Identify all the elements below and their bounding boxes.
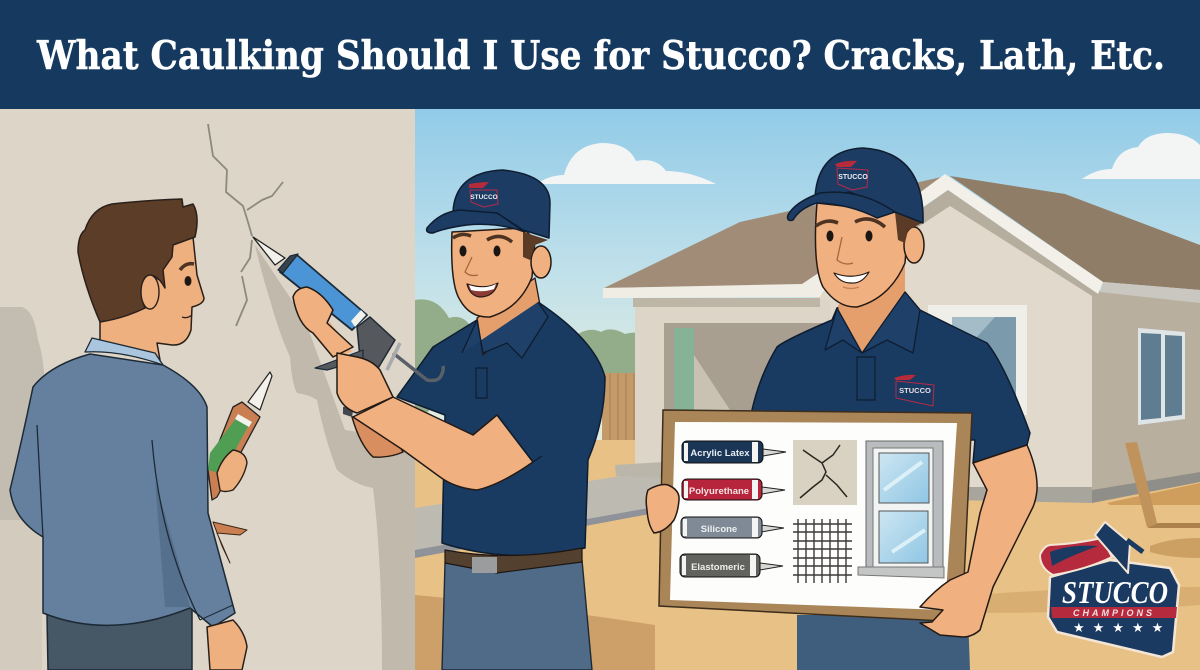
pants [442,560,592,670]
logo badge [1048,560,1179,657]
logo: Stucco Champions [1040,522,1179,657]
tube: Silicone: Silicone [701,524,737,535]
hair [523,232,548,260]
face [815,203,908,307]
tube [280,255,367,330]
lower hand [207,620,247,670]
forearm to top hand [313,322,352,357]
logo trowel [1095,522,1143,573]
sweater [10,354,235,627]
worker 2 [752,148,1030,670]
house: front wall [812,200,1092,490]
house: front window [928,305,1027,415]
neck [838,263,905,353]
house: left wing wall [635,300,830,464]
upper hand [293,287,353,357]
lath mesh sample [793,519,852,583]
cap [453,170,550,238]
sign board [659,410,972,622]
strap behind [213,522,247,563]
house [603,174,1200,528]
ear [141,275,159,309]
cap [815,148,923,223]
worker 2 right arm and hand [920,445,1037,637]
nozzle [253,237,285,265]
logo stars: ★★★★★ [1073,621,1171,636]
clouds [536,133,1200,184]
window sample [858,441,944,578]
pants [797,615,970,670]
collar [825,292,920,353]
tube: Polyurethane: Polyurethane [689,486,749,497]
hair [895,212,922,243]
face [452,228,535,317]
hand [217,450,247,492]
board frame [659,410,972,622]
arm and sleeve [353,397,533,490]
cap badge: STUCCO [838,174,868,181]
shirt [752,292,1030,463]
header bar [0,0,1200,109]
pants [47,605,192,670]
road [415,470,660,554]
trigger [315,350,363,370]
tube: Silicone [681,517,784,538]
back forearm [352,410,403,457]
eye, brow and smile [180,264,194,318]
house: side window [1138,328,1185,425]
house: left roof [604,176,946,288]
tube: Acrylic Latex: Acrylic Latex [690,448,750,459]
tube: Acrylic Latex [682,441,786,463]
cap badge: STUCCO [470,194,498,201]
collar [85,338,163,365]
ear [531,246,551,278]
caulk gun [253,237,443,417]
stucco crack sample [793,440,857,505]
gun head [357,317,395,370]
eyes, nose, mouth [453,234,512,297]
logo name: STUCCO [1062,574,1168,610]
hair [78,199,197,322]
house: right side wall [1092,290,1200,490]
board surface [670,422,957,610]
wooden stake [1125,442,1200,528]
wall shadows [255,245,415,670]
neck [477,278,540,355]
eyes, nose, mouth [816,219,885,288]
neck and face [100,237,204,360]
crack [208,124,283,326]
house: gable trim [855,174,1103,294]
shirt [397,302,605,555]
collar [462,302,548,358]
fence [602,373,638,441]
house: right roof [950,176,1200,290]
worker 1 [253,170,605,670]
tube: Elastomeric [680,554,783,577]
ear [904,227,924,263]
logo swoosh [1040,538,1112,575]
darker soil [415,595,655,670]
held caulk tube [208,372,272,500]
wall panel with crack [0,109,415,670]
trees [415,299,485,430]
belt [445,548,582,573]
tube: Polyurethane [682,479,785,500]
cap badge [469,182,498,207]
man with caulk tube, back view [10,199,272,670]
cap badge [835,161,868,190]
tube: Elastomeric: Elastomeric [691,562,745,573]
logo band: CHAMPIONS [1073,608,1155,618]
scene: outdoor background [415,109,1200,670]
lower hand [337,353,393,413]
gun rod and hook [393,353,443,380]
worker 2 left hand [646,485,679,533]
shirt badge [894,375,934,406]
shirt badge: STUCCO [899,386,931,395]
ground [415,440,1200,670]
